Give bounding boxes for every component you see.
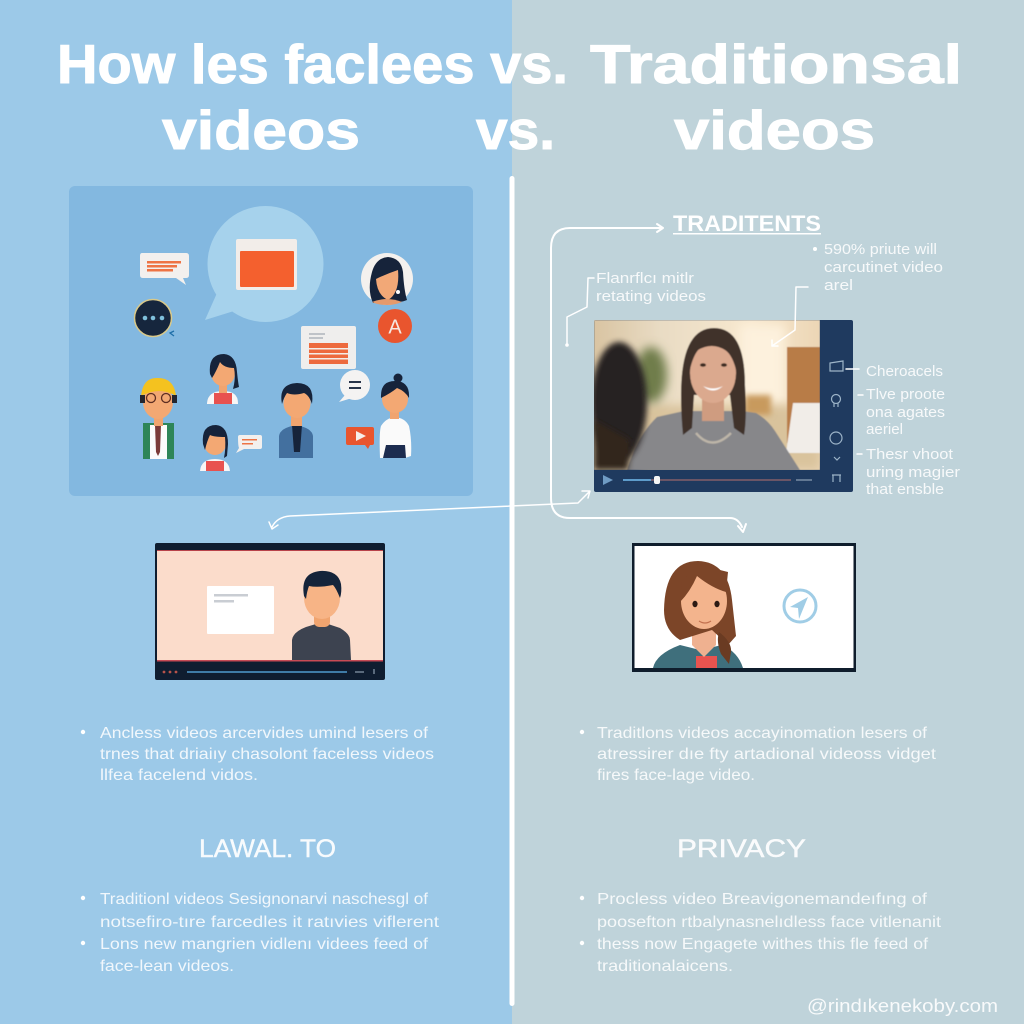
player controls xyxy=(603,475,812,485)
title xyxy=(57,33,962,161)
callout: right side labels: that ensble xyxy=(866,481,944,498)
text block: left upper: Ancless videos arcervides umind lesers of xyxy=(100,725,429,742)
woman avatar xyxy=(361,253,413,305)
play button bubble xyxy=(346,427,374,449)
person: man with glasses xyxy=(140,378,177,459)
text block: left upper: llfea facelend vidos. xyxy=(100,767,258,784)
large speech bubble with video window xyxy=(205,206,324,322)
center divider xyxy=(510,176,514,1006)
subheading: left: LAWAL. TO xyxy=(199,835,336,863)
text block: left upper: trnes that driaiıy chasolont faceless videos xyxy=(100,746,434,763)
faceless presenter xyxy=(292,571,351,660)
person: girl upper xyxy=(207,354,239,404)
text block: right lower: Procless video Breavigonemandeıfıng of xyxy=(597,891,928,908)
title: vs. xyxy=(476,99,555,161)
person: girl lower with bubble xyxy=(200,425,262,471)
text block: right lower: thess now Engagete withes this fle feed of xyxy=(597,936,929,953)
text block: right upper: fires face-lage video. xyxy=(597,767,755,784)
text block: right lower xyxy=(580,891,942,975)
video player: real footage xyxy=(591,320,853,492)
panel: faceless illustration xyxy=(69,186,473,496)
faceless video player xyxy=(155,543,385,680)
callout: right side labels: uring magier xyxy=(866,464,960,481)
text block: left lower: notsefiro-tıre farcedles it ratıvies viflerent xyxy=(100,914,440,931)
person: woman with bun xyxy=(380,374,411,458)
callout: right side labels: Thesr vhoot xyxy=(866,446,954,463)
callout: left xyxy=(565,270,706,347)
watermark: @rindıkenekoby.com xyxy=(807,996,998,1016)
title: How les faclees vs. xyxy=(57,33,568,95)
traditional video frame xyxy=(632,543,856,672)
callout: right side labels: ona agates xyxy=(866,404,945,421)
title: videos xyxy=(674,99,875,161)
text block: left lower xyxy=(81,891,440,975)
text block: right lower: traditionalaicens. xyxy=(597,958,733,975)
heading: TRADITENTS: TRADITENTS xyxy=(673,211,821,236)
callout: right side labels: Cheroacels xyxy=(866,363,943,380)
subheading: right: PRIVACY xyxy=(677,835,806,863)
callout: left: Flanrflcı mitlr xyxy=(596,270,694,287)
callout: top right xyxy=(772,241,943,346)
text block: right upper: atressirer dıe fty artadional videoss vidget xyxy=(597,746,937,763)
callout: right side labels: Tlve proote xyxy=(866,386,945,403)
side icons xyxy=(830,361,843,482)
callout: top right: carcutinet video xyxy=(824,259,943,276)
text block: right upper xyxy=(580,725,937,784)
small chat bubble xyxy=(140,253,189,285)
callout: top right: 590% priute will xyxy=(824,241,937,258)
text block: right upper: Traditlons videos accayinomation lesers of xyxy=(597,725,928,742)
orange letter badge xyxy=(378,309,412,343)
text block: left lower: Lons new mangrien vidlenı videes feed of xyxy=(100,936,429,953)
text block: left lower: face-lean videos. xyxy=(100,958,234,975)
dark round typing icon xyxy=(134,300,174,336)
text block: left lower: Traditionl videos Sesignonarvi naschesgl of xyxy=(100,891,429,908)
slide card xyxy=(207,586,274,634)
callout: right side labels: aeriel xyxy=(866,421,903,438)
document card xyxy=(301,326,356,369)
compass icon xyxy=(784,590,816,622)
right panel background xyxy=(512,0,1024,1024)
text block: left upper xyxy=(81,725,434,784)
text block: right lower: poosefton rtbalynasnelıdless face vitlenanit xyxy=(597,914,942,931)
panel: traditional callouts xyxy=(551,211,960,532)
glasses speech bubble xyxy=(339,370,370,402)
left panel background xyxy=(0,0,512,1024)
title: Traditionsal xyxy=(590,33,962,95)
person: man in blue suit xyxy=(279,383,313,458)
arrow: bracket to heading xyxy=(551,224,746,532)
title: videos xyxy=(162,99,360,161)
arrow: video to faceless example xyxy=(269,491,590,529)
timeline xyxy=(163,669,375,674)
callout: top right: arel xyxy=(824,277,853,294)
woman illustration xyxy=(653,561,743,668)
orange letter badge: A xyxy=(388,316,402,338)
callout: right side labels xyxy=(846,363,960,498)
callout: left: retating videos xyxy=(596,288,706,305)
